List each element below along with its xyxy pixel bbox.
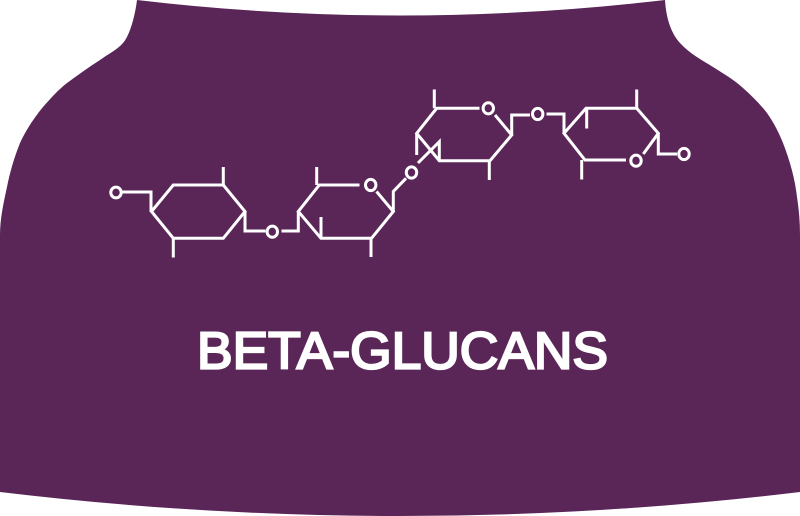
chart: beta-glucan molecular structure [111, 90, 689, 258]
icon: linkage oxygen between rings 2 and 3 [393, 142, 439, 212]
icon: glucose ring 4 [564, 90, 689, 180]
title: BETA-GLUCANS [197, 322, 608, 380]
icon: linkage oxygen between rings 3 and 4 [512, 108, 564, 135]
icon: glucose ring 2 [298, 167, 393, 257]
icon: glucose ring 3 [417, 90, 512, 180]
icon: glucose ring 1 [111, 167, 245, 258]
icon: linkage oxygen between rings 1 and 2 [245, 212, 298, 237]
